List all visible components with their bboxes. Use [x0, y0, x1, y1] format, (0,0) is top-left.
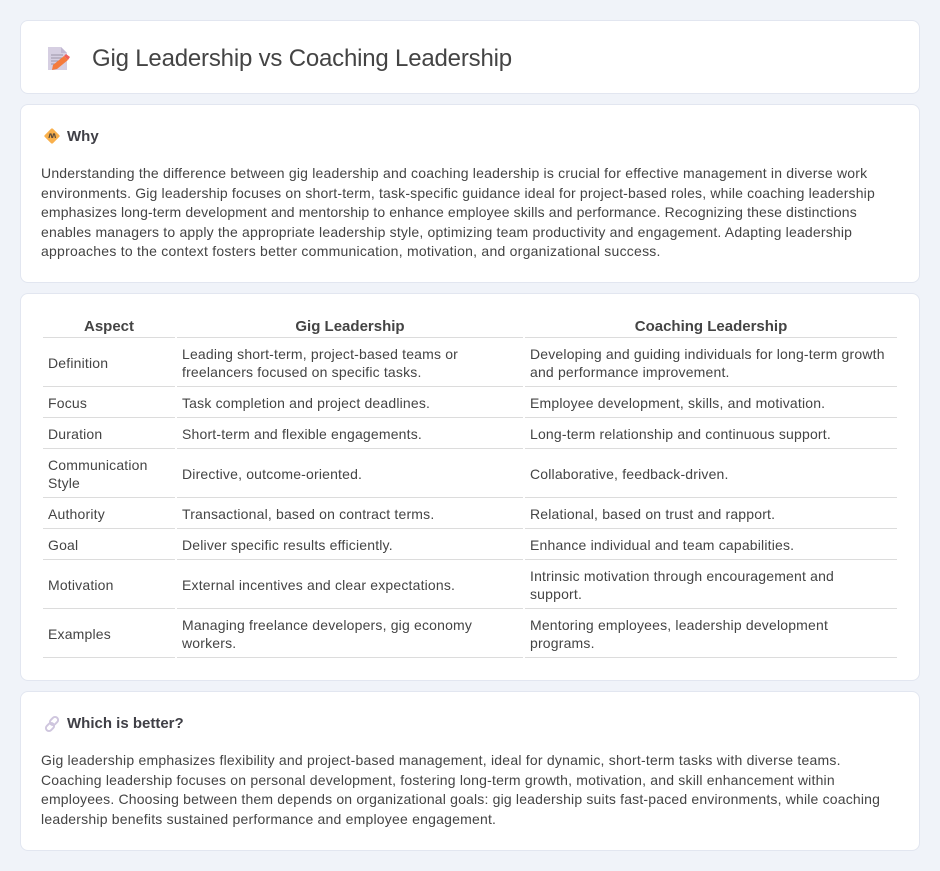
panel: header [20, 20, 920, 94]
comparison table: Directive, outcome-oriented. [182, 466, 362, 482]
comparison table: Goal [48, 536, 78, 552]
comparison table: Communication [48, 456, 148, 472]
comparison table: Duration [48, 426, 102, 442]
comparison table: Collaborative, feedback-driven. [530, 466, 729, 482]
comparison table: workers. [182, 634, 236, 650]
comparison table: freelancers focused on specific tasks. [182, 364, 422, 380]
comparison table: Developing and guiding individuals for long-term growth [530, 346, 885, 362]
comparison table: Examples [48, 626, 111, 642]
comparison table: Managing freelance developers, gig economy [182, 616, 472, 632]
comparison table: External incentives and clear expectations. [182, 576, 455, 592]
comparison table: Leading short-term, project-based teams or [182, 346, 458, 362]
icon: chain link [45, 716, 59, 732]
comparison table: Definition [48, 354, 108, 370]
text: which is better paragraph: leadership benefits sustained performance and employee engagement. [41, 811, 496, 827]
comparison table: Gig Leadership [295, 318, 405, 335]
title: Gig Leadership vs Coaching Leadership [92, 45, 512, 72]
comparison table: and performance improvement. [530, 364, 730, 380]
comparison table: Style [48, 474, 80, 490]
comparison table: Long-term relationship and continuous support. [530, 426, 831, 442]
comparison table: programs. [530, 634, 595, 650]
text: which is better paragraph [41, 752, 880, 827]
text: why paragraph: environments. Gig leadership focuses on short-term, task-specific guidance ideal for project-based roles, while coaching leadership [41, 185, 875, 201]
comparison table: Mentoring employees, leadership development [530, 616, 828, 632]
panel: why [20, 104, 920, 283]
text: which is better paragraph: employees. Choosing between them depends on organizational goals: gig leadership suits fast-paced environments, while coaching [41, 791, 880, 807]
comparison table [43, 318, 897, 658]
text: which is better paragraph: Gig leadership emphasizes flexibility and project-based management, ideal for dynamic, short-term tasks with diverse teams. [41, 752, 841, 768]
heading: why: Why [67, 128, 99, 145]
comparison table: Task completion and project deadlines. [182, 394, 430, 410]
comparison table: Transactional, based on contract terms. [182, 506, 434, 522]
text: why paragraph: approaches to the context fosters better communication, motivation, and organizational success. [41, 243, 661, 259]
comparison table: Focus [48, 394, 87, 410]
panel: comparison table [20, 293, 920, 681]
comparison table: Motivation [48, 576, 114, 592]
comparison table: Coaching Leadership [635, 318, 787, 335]
comparison table: Deliver specific results efficiently. [182, 536, 393, 552]
comparison table: Aspect [84, 318, 134, 335]
comparison table: Short-term and flexible engagements. [182, 426, 422, 442]
comparison table: Relational, based on trust and rapport. [530, 506, 775, 522]
heading: which is better: Which is better? [67, 715, 184, 732]
panel: which is better [20, 691, 920, 851]
text: why paragraph: emphasizes long-term development and mentorship to enhance employee skills and performance. Recognizing these distinctions [41, 204, 857, 220]
icon: warning diamond [44, 128, 60, 144]
comparison table: Employee development, skills, and motivation. [530, 394, 825, 410]
text: which is better paragraph: Coaching leadership focuses on personal development, fostering long-term growth, motivation, and skill enhancement within [41, 772, 835, 788]
text: why paragraph: enables managers to apply the appropriate leadership style, optimizing team productivity and engagement. Adapting leadership [41, 224, 852, 240]
comparison table: Authority [48, 506, 105, 522]
text: why paragraph [41, 165, 875, 259]
comparison table: Intrinsic motivation through encouragement and [530, 568, 834, 584]
comparison table: support. [530, 586, 582, 602]
icon: document with pencil [48, 47, 70, 70]
comparison table: Enhance individual and team capabilities. [530, 536, 794, 552]
text: why paragraph: Understanding the difference between gig leadership and coaching leadership is crucial for effective management in diverse work [41, 165, 867, 181]
